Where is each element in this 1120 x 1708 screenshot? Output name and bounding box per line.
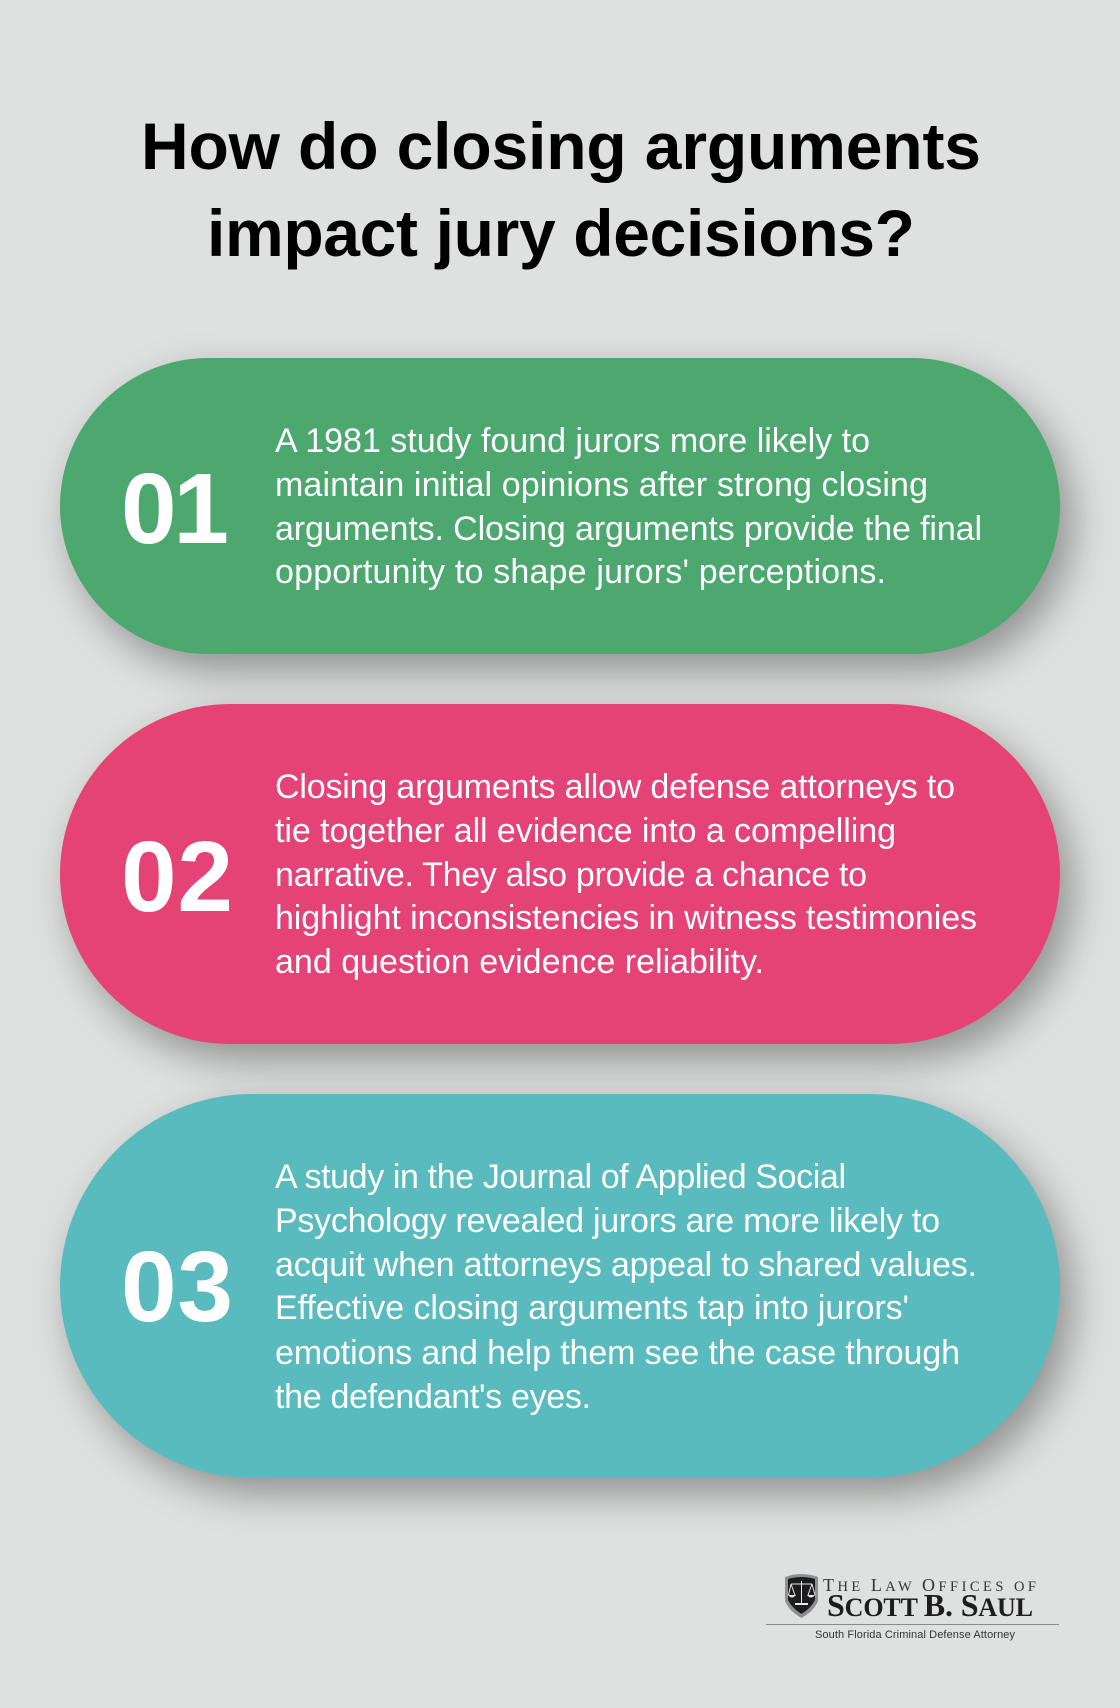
- text block: card 02: [275, 768, 977, 981]
- text block: card 02: tie together all evidence into a compelling: [275, 812, 896, 850]
- text block: card 03: the defendant's eyes.: [275, 1378, 591, 1416]
- logo: The Law Offices of Scott B. Saul: [766, 1574, 1059, 1641]
- title: impact jury decisions?: [207, 196, 915, 270]
- text block: card 01: [275, 422, 982, 591]
- logo line: The Law Offices of: THE LAW OFFICES OF: [823, 1575, 1036, 1595]
- logo line: Scott B. Saul: SCOTT B. SAUL: [827, 1587, 1033, 1623]
- text block: card 02: and question evidence reliability.: [275, 943, 764, 981]
- text block: card 02: narrative. They also provide a chance to: [275, 856, 867, 894]
- logo tagline: South Florida Criminal Defense Attorney: [815, 1629, 1016, 1641]
- text block: card 01: A 1981 study found jurors more likely to: [275, 422, 870, 460]
- text block: card 03: [275, 1158, 977, 1416]
- text block: card 03: Psychology revealed jurors are more likely to: [275, 1202, 940, 1240]
- text block: card 02: highlight inconsistencies in witness testimonies: [275, 899, 977, 937]
- text block: card 03: Effective closing arguments tap into jurors': [275, 1289, 909, 1327]
- text block: card 03: emotions and help them see the case through: [275, 1334, 960, 1372]
- panel: card 03: [60, 1094, 1060, 1478]
- text block: card 01: arguments. Closing arguments provide the final: [275, 510, 982, 548]
- icon: shield with scales of justice: [785, 1574, 818, 1618]
- text block: card 03: acquit when attorneys appeal to shared values.: [275, 1246, 977, 1284]
- panel: card 02: [60, 704, 1060, 1044]
- text block: card 01: maintain initial opinions after strong closing: [275, 466, 928, 504]
- number 01: 01: [121, 453, 229, 565]
- number 03: 03: [121, 1231, 233, 1343]
- text block: card 03: A study in the Journal of Applied Social: [275, 1158, 846, 1196]
- number 02: 02: [121, 821, 233, 933]
- panel: card 01: [60, 358, 1060, 654]
- text block: card 01: opportunity to shape jurors' perceptions.: [275, 553, 886, 591]
- text block: card 02: Closing arguments allow defense attorneys to: [275, 768, 955, 806]
- title: How do closing arguments: [141, 109, 981, 183]
- title: [141, 109, 981, 270]
